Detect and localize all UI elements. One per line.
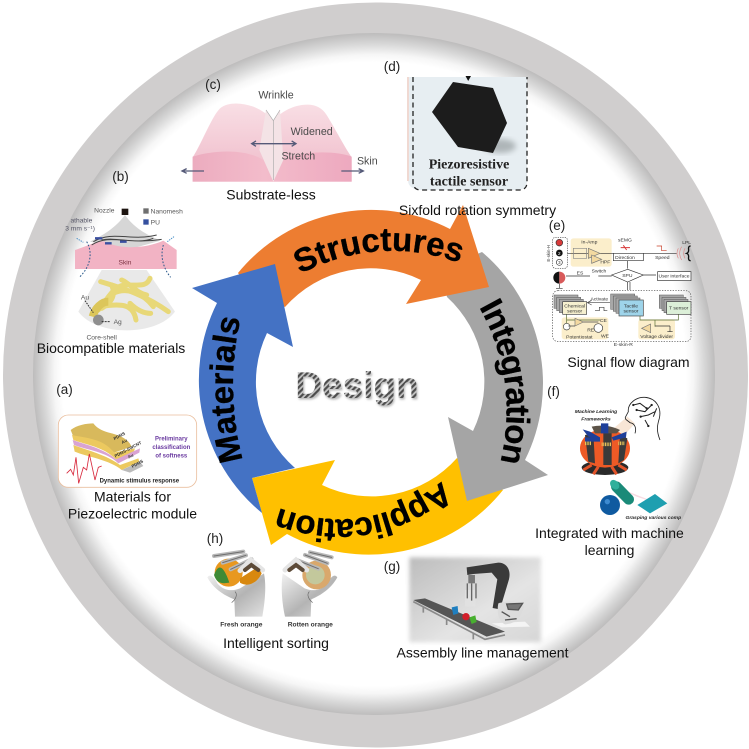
circuit diagram: 2 bbox=[558, 251, 561, 256]
hands with oranges bbox=[207, 552, 337, 629]
circuit diagram: sensor bbox=[567, 308, 582, 314]
illustration: nanomesh: Ag bbox=[114, 319, 122, 326]
illustration: nanomesh: Core-shell bbox=[86, 335, 117, 342]
circuit diagram: sensor bbox=[624, 308, 639, 314]
circuit diagram: HPF bbox=[600, 259, 610, 265]
illustration card: PDMS bbox=[113, 431, 126, 441]
circuit diagram: 3 bbox=[558, 260, 561, 265]
illustration: nanomesh: PU bbox=[151, 219, 160, 226]
caption (g): Assembly line management bbox=[397, 644, 569, 660]
circuit diagram: Activate bbox=[590, 297, 608, 303]
caption (b): Biocompatible materials bbox=[37, 340, 185, 356]
illustration card: Au bbox=[121, 438, 128, 445]
label (f): (f) bbox=[547, 384, 560, 399]
circuit diagram: Switch bbox=[592, 268, 607, 274]
illustration card: Preliminary bbox=[155, 437, 188, 443]
illustration card: PDMS bbox=[131, 458, 144, 469]
label (h): (h) bbox=[207, 531, 223, 546]
illustration: skin wrinkle: Stretch bbox=[281, 151, 315, 163]
circuit diagram: sEMG bbox=[618, 238, 632, 244]
panel: cycle arrows bbox=[192, 205, 548, 555]
circuit diagram: Direction bbox=[615, 255, 635, 261]
label (e): (e) bbox=[549, 218, 565, 233]
illustration: skin wrinkle: Wrinkle bbox=[258, 90, 294, 102]
label (d): (d) bbox=[384, 59, 400, 74]
circuit diagram: Tactile bbox=[624, 303, 638, 309]
illustration card: Dynamic stimulus response bbox=[100, 479, 180, 485]
illustration card: PDMS-SWCNT bbox=[114, 440, 143, 459]
panel (d): sixfold rotation symmetry bbox=[384, 59, 556, 218]
panel (c): substrate-less bbox=[182, 77, 378, 202]
illustration: skin wrinkle bbox=[182, 90, 378, 182]
panel (g): assembly line bbox=[384, 557, 569, 660]
circuit diagram: ES bbox=[577, 270, 584, 276]
circuit diagram: CE bbox=[600, 318, 607, 324]
circuit diagram: T sensor bbox=[669, 305, 689, 311]
illustration: soft gripper and brain: Machine Learning bbox=[575, 409, 617, 415]
label (g): (g) bbox=[384, 559, 400, 574]
hands with oranges: Rotten orange bbox=[288, 622, 333, 629]
circuit diagram: LPL bbox=[682, 240, 691, 246]
dashed outline bbox=[413, 77, 527, 190]
center label: Design: Design bbox=[295, 365, 419, 406]
panel (h): intelligent sorting bbox=[207, 531, 337, 651]
arrow: materials bbox=[192, 264, 295, 513]
caption (e): Signal flow diagram bbox=[567, 354, 690, 370]
arrow: structures bbox=[238, 205, 489, 307]
illustration: nanomesh bbox=[65, 207, 183, 342]
arrow: integration bbox=[440, 252, 548, 501]
circuit diagram: Chemical bbox=[564, 303, 585, 309]
hexagon sensor bbox=[432, 82, 507, 153]
caption (f): Integrated with machine bbox=[535, 525, 684, 541]
circuit diagram: E-skin-H bbox=[546, 245, 551, 262]
panel (e): signal flow diagram bbox=[546, 218, 691, 370]
illustration: nanomesh: Nanomesh bbox=[151, 208, 183, 215]
circuit diagram: In-Amp bbox=[581, 240, 598, 246]
label: Materials: Materials bbox=[209, 317, 242, 464]
illustration: nanomesh: Au bbox=[81, 294, 89, 301]
hexagon shadow bbox=[484, 139, 516, 153]
illustration: skin wrinkle: Skin bbox=[357, 156, 378, 168]
illustration card bbox=[58, 415, 197, 487]
circuit diagram: E-skin-R bbox=[614, 342, 633, 348]
caption (c): Substrate-less bbox=[226, 186, 316, 202]
label (b): (b) bbox=[112, 169, 129, 184]
illustration: nanomesh: Nozzle bbox=[94, 207, 115, 214]
label: Application: Application bbox=[276, 482, 448, 542]
robot assembly illustration bbox=[409, 557, 541, 642]
illustration: soft gripper and brain: Frameworks bbox=[581, 417, 611, 423]
caption (a) second line: Piezoelectric module bbox=[68, 506, 197, 522]
circuit diagram: Speed bbox=[655, 255, 670, 261]
illustration: soft gripper and brain: Grasping various comp bbox=[625, 515, 681, 521]
panel (f): integrated with machine learning bbox=[535, 384, 684, 558]
circuit diagram: SPU bbox=[622, 273, 633, 279]
sensor card bbox=[408, 77, 527, 190]
circuit diagram bbox=[546, 237, 691, 348]
circuit diagram: Potentiostat bbox=[566, 335, 593, 341]
label: Structures: Structures bbox=[294, 229, 462, 272]
sensor title: tactile sensor bbox=[430, 174, 508, 190]
caption (a): Materials for bbox=[94, 488, 171, 504]
circuit diagram: RE bbox=[587, 328, 595, 334]
label (c): (c) bbox=[205, 77, 221, 92]
panel (b): biocompatible materials bbox=[37, 169, 185, 356]
caption (f) second line: learning bbox=[585, 542, 634, 558]
illustration card: Au bbox=[127, 452, 135, 460]
sensor title: Piezoresistive bbox=[429, 158, 509, 172]
illustration: soft gripper and brain bbox=[575, 397, 681, 521]
circuit diagram: WE bbox=[601, 334, 610, 340]
illustration card: of softness bbox=[155, 453, 188, 459]
marker triangle bbox=[466, 76, 471, 81]
caption (d): Sixfold rotation symmetry bbox=[399, 202, 556, 218]
panel (a): piezoelectric module bbox=[56, 382, 197, 522]
illustration: skin wrinkle: Widened bbox=[291, 126, 333, 138]
circuit diagram: Voltage divider bbox=[640, 334, 673, 340]
illustration card: classification bbox=[152, 445, 191, 451]
illustration: nanomesh: athable bbox=[70, 218, 93, 225]
label: Integration: Integration bbox=[480, 298, 531, 463]
label (a): (a) bbox=[56, 382, 73, 397]
hands with oranges: Fresh orange bbox=[220, 622, 263, 629]
illustration: nanomesh: 3 mm s⁻¹) bbox=[65, 226, 95, 233]
caption (h): Intelligent sorting bbox=[223, 635, 329, 651]
illustration: nanomesh: Skin bbox=[119, 260, 132, 267]
arrow: application bbox=[252, 458, 503, 555]
circuit diagram: User interface bbox=[658, 274, 690, 280]
